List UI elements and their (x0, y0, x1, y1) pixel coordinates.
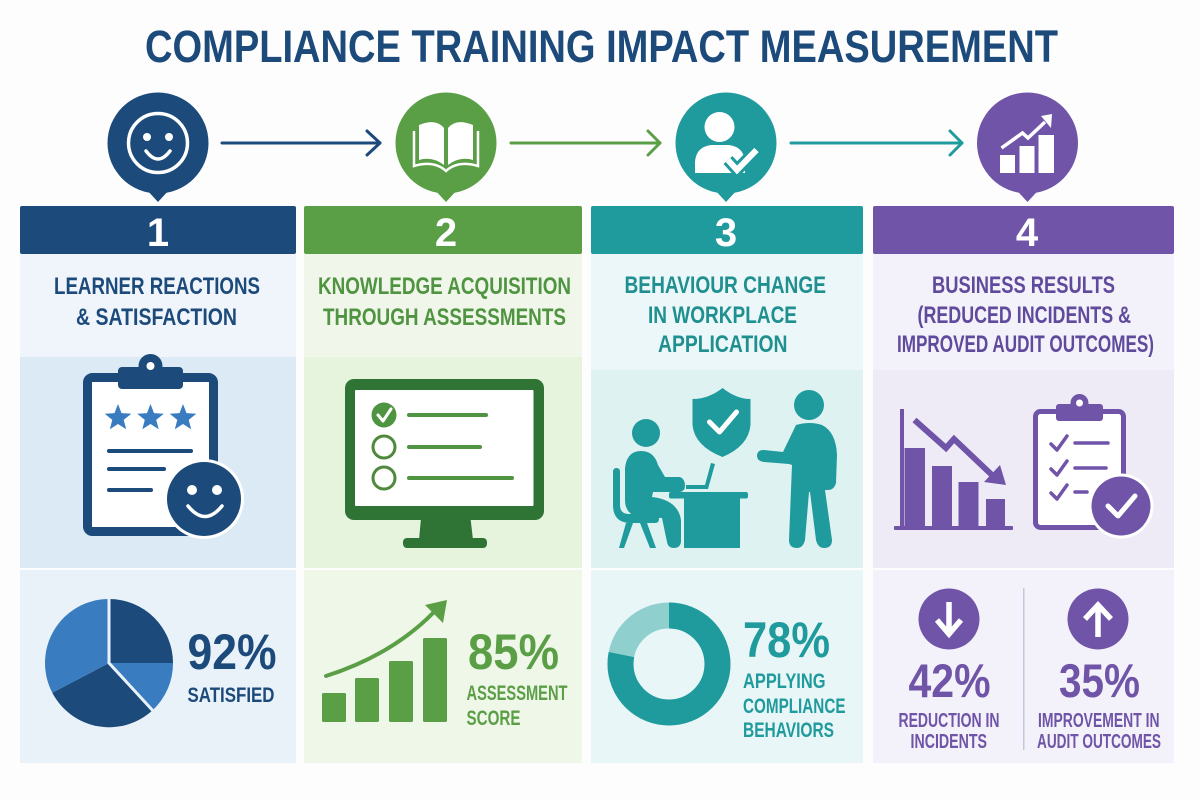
heading panel 2: THROUGH ASSESSMENTS (323, 304, 566, 331)
icon: person with check pin (676, 92, 776, 202)
step number bar 4: 4 (1016, 211, 1039, 255)
stat panel: 92% satisfied: 92% (188, 624, 276, 680)
stat panel: 78% applying compliance behaviors: COMPLIANCE (743, 695, 846, 718)
icon: standing person (757, 390, 837, 548)
panel: column 3 behaviour change (591, 92, 863, 763)
pie chart (45, 598, 173, 727)
step number bar 1: 1 (147, 211, 169, 255)
icon panel: declining chart and audit clipboard (873, 370, 1174, 568)
stat panel: 78% applying compliance behaviors: 78% (743, 612, 830, 668)
stat panel: 92% satisfied: SATISFIED (188, 684, 274, 707)
icon: seated person at desk (613, 419, 748, 548)
heading panel 3 (591, 254, 863, 370)
stat: 42% reduction in incidents: INCIDENTS (910, 731, 987, 753)
panel: column 4 business results (873, 92, 1174, 763)
heading panel 4: (REDUCED INCIDENTS & (918, 302, 1131, 329)
icon: shield (692, 388, 750, 457)
heading panel 1: LEARNER REACTIONS (54, 273, 260, 300)
heading panel 1: & SATISFACTION (76, 304, 237, 331)
stat: 35% improvement in audit outcomes (1037, 588, 1161, 753)
arrow: step 1 to step 2 (222, 131, 380, 155)
step number bar 1 (20, 206, 296, 255)
stat: 42% reduction in incidents: 42% (908, 654, 990, 707)
icon: smiley pin (108, 92, 208, 202)
icon: growth chart pin (977, 92, 1078, 202)
stat panel: 85% assessment score: 85% (468, 624, 559, 680)
arrow: step 3 to step 4 (791, 131, 962, 155)
step number bar 3 (591, 206, 863, 255)
step number bar 2 (304, 206, 582, 255)
stat panel: 78% applying compliance behaviors: APPLYING (743, 670, 826, 693)
stat panel: 42% and 35% (873, 570, 1174, 763)
icon panel: clipboard with stars and smiley (20, 354, 296, 568)
heading panel 2: KNOWLEDGE ACQUISITION (318, 273, 571, 300)
title: COMPLIANCE TRAINING IMPACT MEASUREMENT (145, 21, 1058, 72)
heading panel 3: APPLICATION (658, 331, 788, 358)
heading panel 1 (20, 254, 296, 357)
donut chart (620, 616, 718, 712)
stat panel: 78% applying compliance behaviors: BEHAVIORS (743, 719, 834, 742)
icon: book pin (396, 92, 496, 202)
stat panel: 85% assessment score: ASSESSMENT (466, 682, 568, 705)
stat panel: 85% assessment score: SCORE (466, 707, 520, 730)
step number bar 3: 3 (715, 211, 737, 255)
icon: declining bar chart (894, 409, 1013, 530)
step number bar 2: 2 (435, 211, 457, 255)
stat panel: 78% applying compliance behaviors (591, 570, 863, 763)
bar chart with rising arrow (322, 600, 447, 722)
icon panel: people at desk with shield (591, 370, 863, 568)
panel: column 2 knowledge acquisition (304, 92, 582, 763)
heading panel 3: IN WORKPLACE (648, 302, 797, 329)
heading panel 3: BEHAVIOUR CHANGE (624, 272, 826, 299)
stat: 35% improvement in audit outcomes: 35% (1059, 654, 1140, 707)
stat: 42% reduction in incidents: REDUCTION IN (898, 710, 1000, 732)
heading panel 4: BUSINESS RESULTS (932, 272, 1115, 299)
arrow: step 2 to step 3 (511, 131, 660, 155)
stat panel: 85% assessment score (304, 570, 582, 763)
stat: 42% reduction in incidents (898, 588, 1000, 753)
step number bar 4 (873, 206, 1174, 255)
icon panel: monitor with checklist (304, 357, 582, 568)
stat panel: 92% satisfied (20, 570, 296, 763)
panel: column 1 learner reactions (20, 92, 296, 763)
heading panel 2 (304, 254, 582, 357)
icon: clipboard with check badge (1036, 394, 1154, 538)
heading panel 4 (873, 254, 1174, 370)
